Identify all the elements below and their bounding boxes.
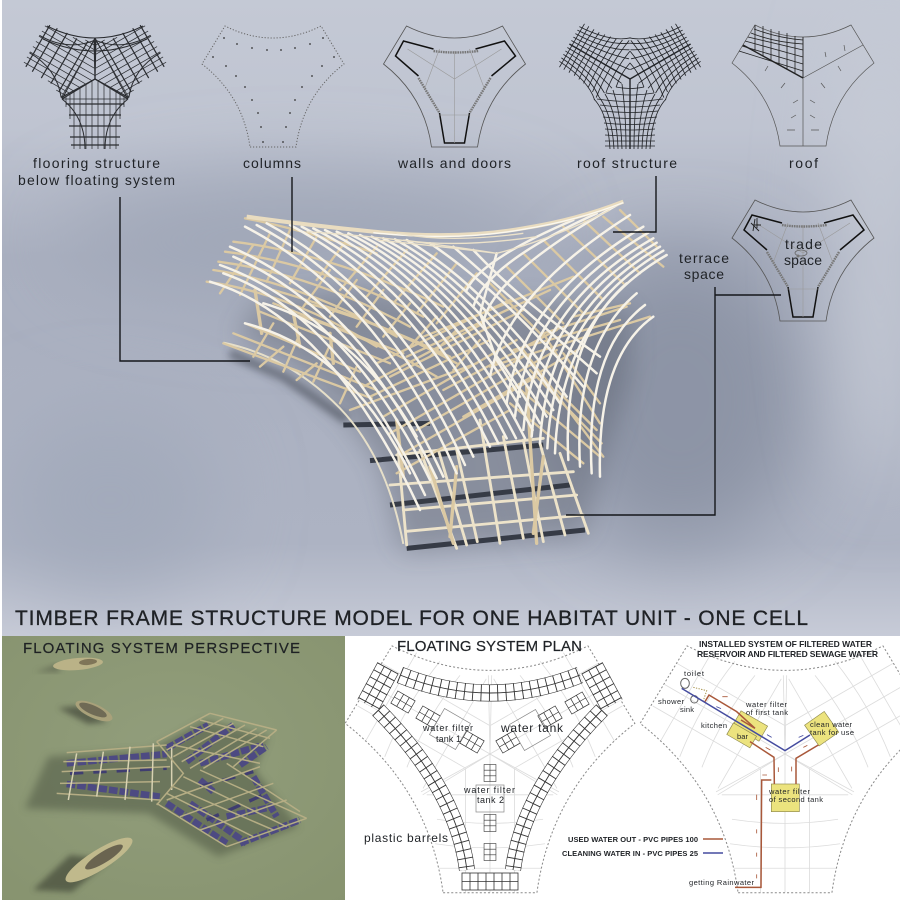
label: roof structure: roof structure xyxy=(577,155,677,171)
icon: roof plan xyxy=(732,25,874,146)
columns xyxy=(255,290,543,543)
floating raft structure xyxy=(25,713,307,857)
label: bar: bar xyxy=(737,732,748,741)
label: water filter of first tank: water filter xyxy=(745,700,788,709)
boat 2 xyxy=(58,696,115,726)
faint plan grid xyxy=(336,626,644,893)
label: water filter of second tank xyxy=(768,787,823,804)
yellow tanks xyxy=(727,711,839,812)
icon: columns plan xyxy=(202,26,344,147)
panel: installed water system xyxy=(562,626,900,893)
barrels: right corner xyxy=(592,668,612,705)
label: walls and doors: walls and doors xyxy=(397,155,511,171)
barrels: left corner xyxy=(368,668,388,705)
fixtures xyxy=(681,678,707,703)
label: water filter tank 1 xyxy=(422,723,473,744)
label: water filter tank 2 xyxy=(463,785,515,805)
leader line: columns xyxy=(291,177,293,252)
tank outlines xyxy=(430,709,550,812)
roof ribs: left family xyxy=(210,223,600,510)
label: water filter tank 2: water filter xyxy=(463,785,515,795)
legend: clean water: CLEANING WATER IN - PVC PIPES 25 xyxy=(562,849,698,858)
label: getting rainwater: getting Rainwater xyxy=(689,878,754,887)
label: columns: columns xyxy=(243,155,301,171)
label: trade space xyxy=(784,236,822,268)
label: terrace space xyxy=(679,250,729,282)
leader line: flooring structure xyxy=(120,197,250,361)
label: flooring structure: flooring structure xyxy=(33,155,160,171)
panel: floating system plan xyxy=(336,626,900,900)
clean water pipes xyxy=(682,688,810,751)
roof cross members xyxy=(207,210,663,473)
label: terrace space: terrace xyxy=(679,250,729,266)
label: trade space: space xyxy=(784,252,822,268)
leader line: roof structure xyxy=(613,176,656,232)
barrels: right row xyxy=(513,710,602,870)
boat 3 xyxy=(33,831,137,892)
label: water filter of second tank: of second tank xyxy=(769,795,823,804)
label: plastic barrels: plastic barrels xyxy=(364,831,448,845)
panel: floating system perspective xyxy=(0,636,345,900)
label: kitchen: kitchen xyxy=(701,721,727,730)
icon: terrace and trade space plan xyxy=(732,200,874,321)
label: trade space: trade xyxy=(785,236,822,252)
legend: used water: USED WATER OUT - PVC PIPES 100 xyxy=(568,835,698,844)
icon: roof structure plan xyxy=(551,13,709,149)
label: water filter of second tank: water filter xyxy=(768,787,810,796)
panel subheading: RESERVOIR AND FILTERED SEWAGE WATER xyxy=(697,649,878,659)
panel heading: FLOATING SYSTEM PLAN xyxy=(397,638,582,655)
label: shower: shower xyxy=(658,697,684,706)
faint plan grid xyxy=(631,626,900,893)
label: clean water tank for use: tank for use xyxy=(810,728,854,737)
label: water filter tank 1: tank 1 xyxy=(436,734,461,744)
label: below floating system: below floating system xyxy=(18,172,175,188)
model shadow xyxy=(230,290,630,552)
label: terrace space: space xyxy=(684,266,724,282)
icon: walls and doors plan xyxy=(384,26,526,147)
panel heading: INSTALLED SYSTEM OF FILTERED WATER xyxy=(699,639,872,649)
used water pipes xyxy=(705,695,818,887)
label: water filter tank 2: tank 2 xyxy=(477,795,504,805)
barrels: left row xyxy=(378,710,467,870)
barrel clusters xyxy=(391,691,589,860)
barrels: top row xyxy=(400,675,580,693)
label: water filter tank 1: water filter xyxy=(422,723,473,733)
flow arrows xyxy=(716,697,807,878)
panel heading: FLOATING SYSTEM PERSPECTIVE xyxy=(23,640,300,657)
icon: flooring structure plan xyxy=(18,15,172,149)
label: water filter of first tank: of first tank xyxy=(746,708,788,717)
label: water tank: water tank xyxy=(500,721,564,735)
background xyxy=(0,0,900,640)
label: roof: roof xyxy=(789,155,818,171)
label: water filter of first tank xyxy=(745,700,788,717)
leader line: terrace space xyxy=(566,287,781,515)
roof ribs: right family xyxy=(467,203,667,477)
label: clean water tank for use xyxy=(810,720,854,737)
boat 1 xyxy=(35,656,103,672)
roof top edge xyxy=(247,202,623,253)
floor beams xyxy=(223,303,588,548)
barrels: bottom block xyxy=(462,873,518,890)
label: toilet: toilet xyxy=(684,669,705,678)
label: sink: sink xyxy=(680,705,694,714)
timber frame model xyxy=(207,202,667,552)
label: clean water tank for use: clean water xyxy=(810,720,852,729)
main title: TIMBER FRAME STRUCTURE MODEL FOR ONE HABITAT UNIT - ONE CELL xyxy=(15,607,808,630)
